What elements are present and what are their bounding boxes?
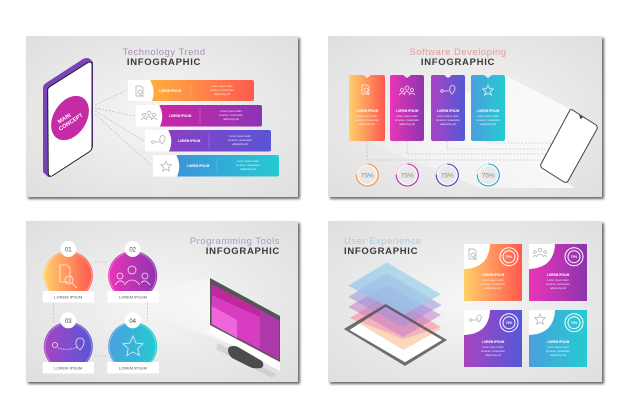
bar 2: Lorem ipsum dolor [220, 109, 242, 113]
bar 2: sit amet, consectetur [219, 113, 243, 117]
bar 4: Lorem ipsum dolor [237, 159, 259, 163]
card 4: adipiscing elit [550, 353, 566, 357]
bar 4 [153, 155, 279, 176]
heading: user experience [344, 236, 422, 257]
light beam [366, 75, 575, 188]
bar 1: Lorem ipsum dolor [211, 84, 233, 88]
heading: programming tools: Programming Tools [190, 236, 280, 247]
card 3: LOREM IPSUM [482, 340, 505, 344]
card 1: Lorem ipsum dolor [482, 278, 504, 282]
step 4: 04 [129, 319, 137, 325]
step 4: LOREM IPSUM [119, 366, 147, 370]
card 2 [390, 75, 424, 141]
connector lines [95, 90, 152, 166]
step 1: LOREM IPSUM [54, 294, 82, 300]
bar 3: LOREM IPSUM [178, 139, 201, 143]
icon: phone with main concept [43, 58, 97, 177]
card 4: Lorem ipsum dolor [477, 114, 499, 118]
heading: user experience: User Experience [344, 236, 422, 247]
card 1 [349, 75, 385, 141]
card 4: 75% [571, 321, 577, 325]
heading: software developing [409, 47, 507, 68]
card 4: Lorem ipsum dolor [547, 345, 569, 349]
progress ring 2 [396, 164, 418, 186]
panel: programming tools [26, 221, 300, 384]
panel: software developing [328, 36, 604, 199]
step 1: 01 [65, 248, 72, 254]
tablet frame [344, 304, 447, 366]
card 3: sit amet, consectetur [436, 118, 460, 122]
bar 4: sit amet, consectetur [236, 163, 260, 167]
card 3: Lorem ipsum dolor [482, 345, 504, 349]
bar 1: adipiscing elit [214, 92, 230, 96]
card 4: LOREM IPSUM [477, 109, 500, 113]
card 4: LOREM IPSUM [547, 340, 570, 344]
progress ring 4: 75% [482, 172, 495, 180]
bar 1 [128, 80, 254, 101]
card 3: LOREM IPSUM [437, 109, 460, 113]
main concept badge: MAIN [57, 113, 72, 125]
step 2 [107, 241, 159, 302]
card 3: adipiscing elit [440, 122, 456, 126]
step 3: LOREM IPSUM [54, 366, 82, 370]
heading: programming tools: INFOGRAPHIC [206, 246, 280, 257]
main concept badge [43, 89, 97, 147]
card 4: adipiscing elit [480, 122, 496, 126]
card 1: 75% [506, 255, 512, 259]
heading: programming tools [190, 236, 280, 257]
card 2: LOREM IPSUM [396, 109, 419, 113]
card 3: sit amet, consectetur [481, 349, 505, 353]
card 4 [471, 75, 505, 141]
step 2: 02 [129, 248, 137, 254]
stacked layers [348, 262, 442, 350]
panel: user experience [328, 221, 604, 384]
progress ring 1 [356, 164, 378, 186]
step 1 [43, 241, 94, 302]
card 3: Lorem ipsum dolor [437, 114, 459, 118]
step 3: 03 [65, 319, 72, 325]
connector lines [53, 262, 148, 356]
card 4: sit amet, consectetur [546, 349, 570, 353]
card 1: LOREM IPSUM [482, 273, 505, 277]
card 1: LOREM IPSUM [356, 109, 379, 113]
icon: isometric monitor [210, 278, 280, 378]
card 1 [464, 244, 522, 301]
bar 4: LOREM IPSUM [187, 164, 210, 168]
icon: tilted phone [541, 110, 597, 182]
card 2: sit amet, consectetur [395, 118, 419, 122]
connector lines [367, 141, 566, 160]
step 2: LOREM IPSUM [119, 294, 147, 300]
light beam [173, 279, 245, 350]
card 2: Lorem ipsum dolor [396, 114, 418, 118]
progress ring 1: 75% [361, 172, 374, 180]
card 1: adipiscing elit [485, 286, 501, 290]
step 4 [107, 312, 159, 374]
card 3 [464, 310, 522, 367]
card 2 [529, 244, 587, 301]
card 1: sit amet, consectetur [481, 282, 505, 286]
bar 4: adipiscing elit [240, 167, 256, 171]
card 4 [529, 310, 587, 367]
progress ring 3 [436, 164, 458, 186]
panel: technology trend [26, 36, 300, 199]
heading: user experience: INFOGRAPHIC [344, 246, 418, 257]
progress ring 4 [477, 164, 499, 186]
card 2: LOREM IPSUM [547, 273, 570, 277]
bar 1: LOREM IPSUM [159, 89, 182, 93]
progress ring 2: 75% [401, 172, 414, 180]
card 2: adipiscing elit [550, 286, 566, 290]
bar 3 [145, 130, 271, 152]
heading: technology trend: INFOGRAPHIC [127, 57, 201, 68]
heading: technology trend: Technology Trend [122, 47, 206, 58]
progress ring 3: 75% [441, 172, 454, 180]
bar 2: adipiscing elit [223, 117, 239, 121]
main concept badge: CONCEPT [58, 112, 85, 133]
bar 2: LOREM IPSUM [169, 114, 192, 118]
step 3 [43, 312, 94, 374]
card 3: 75% [506, 321, 512, 325]
card 2: 75% [571, 255, 577, 259]
bar 3: adipiscing elit [232, 142, 248, 146]
heading: software developing: Software Developing [409, 47, 507, 58]
bar 3: sit amet, consectetur [228, 138, 252, 142]
card 1: sit amet, consectetur [355, 118, 379, 122]
card 2: sit amet, consectetur [546, 282, 570, 286]
card 2: Lorem ipsum dolor [547, 278, 569, 282]
bar 3: Lorem ipsum dolor [229, 134, 251, 138]
card 2: adipiscing elit [399, 122, 415, 126]
heading: software developing: INFOGRAPHIC [421, 57, 495, 68]
bar 2 [136, 105, 262, 126]
card 1: Lorem ipsum dolor [356, 114, 378, 118]
bar 1: sit amet, consectetur [210, 88, 234, 92]
heading: technology trend [122, 47, 206, 68]
card 4: sit amet, consectetur [476, 118, 500, 122]
card 3 [431, 75, 465, 141]
card 1: adipiscing elit [359, 122, 375, 126]
icon: tablet base [344, 304, 447, 366]
card 3: adipiscing elit [485, 353, 501, 357]
